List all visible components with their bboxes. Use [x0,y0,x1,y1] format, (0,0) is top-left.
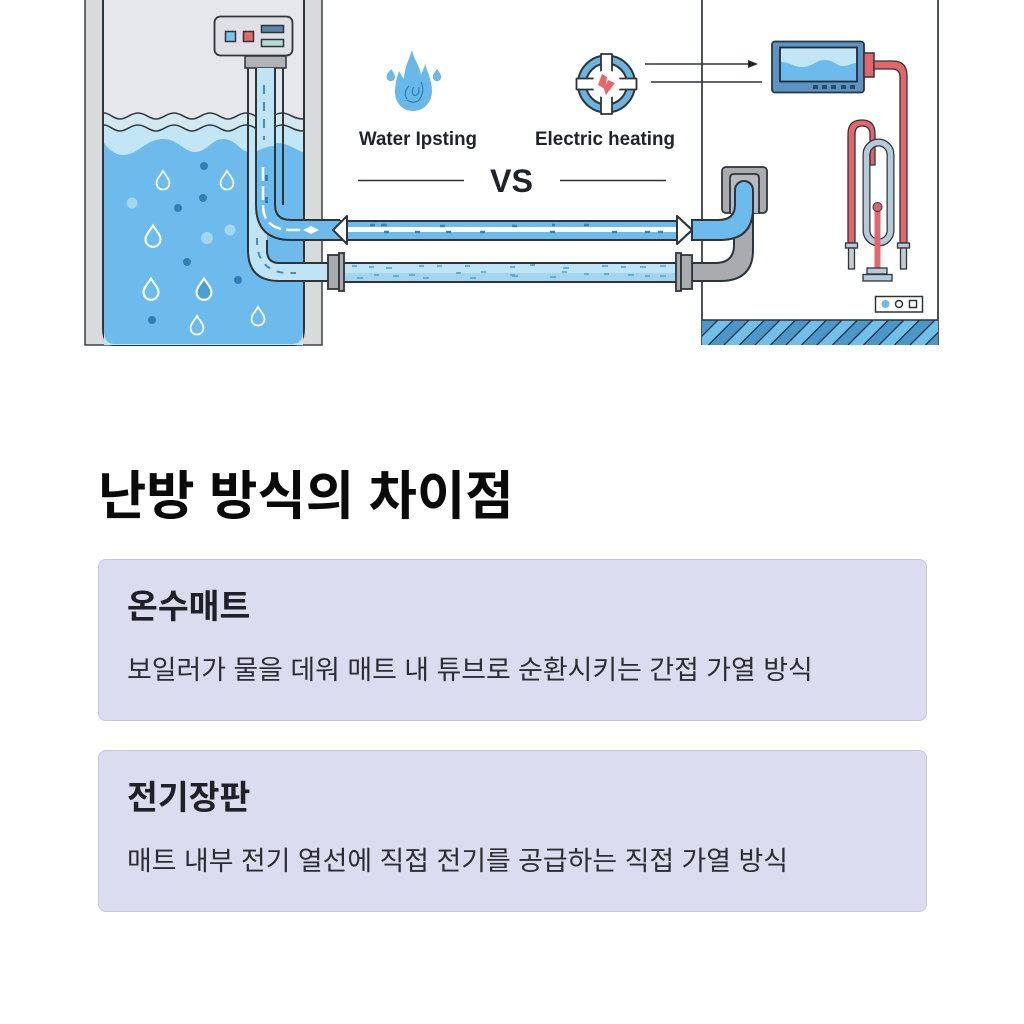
card description: 보일러가 물을 데워 매트 내 튜브로 순환시키는 간접 가열 방식 [127,655,813,685]
supply pipe from tank [256,68,340,240]
card: electric mat [98,750,927,912]
electric room wall [702,0,938,345]
water drops [144,171,264,334]
diagram: water vs electric heating [84,0,939,346]
left flange [328,253,344,291]
monitor [772,42,874,92]
heating wire [846,61,910,281]
label: water: Water Ipsting [359,128,477,150]
card heading: 전기장판 [127,780,250,817]
return pipe from tank [248,68,330,281]
hatched floor [702,319,938,345]
card: hot-water mat [98,559,927,721]
arrow lines to monitor [645,60,762,82]
small control box [876,296,922,312]
card heading: 온수매트 [127,589,250,626]
return water pipe [342,263,678,282]
VS label: VS [490,163,533,199]
label: electric: Electric heating [535,128,675,150]
outlet plate and pipe elbows [676,167,767,291]
control panel [214,16,292,68]
card description: 매트 내부 전기 열선에 직접 전기를 공급하는 직접 가열 방식 [127,846,788,876]
heated water pipe, double arrow [333,216,692,244]
electric heating icon [576,54,636,114]
bubbles [126,162,242,324]
heating icon: flame and water drops [387,50,441,111]
boiler tank [85,0,322,345]
title: 난방 방식의 차이점 [98,467,514,526]
